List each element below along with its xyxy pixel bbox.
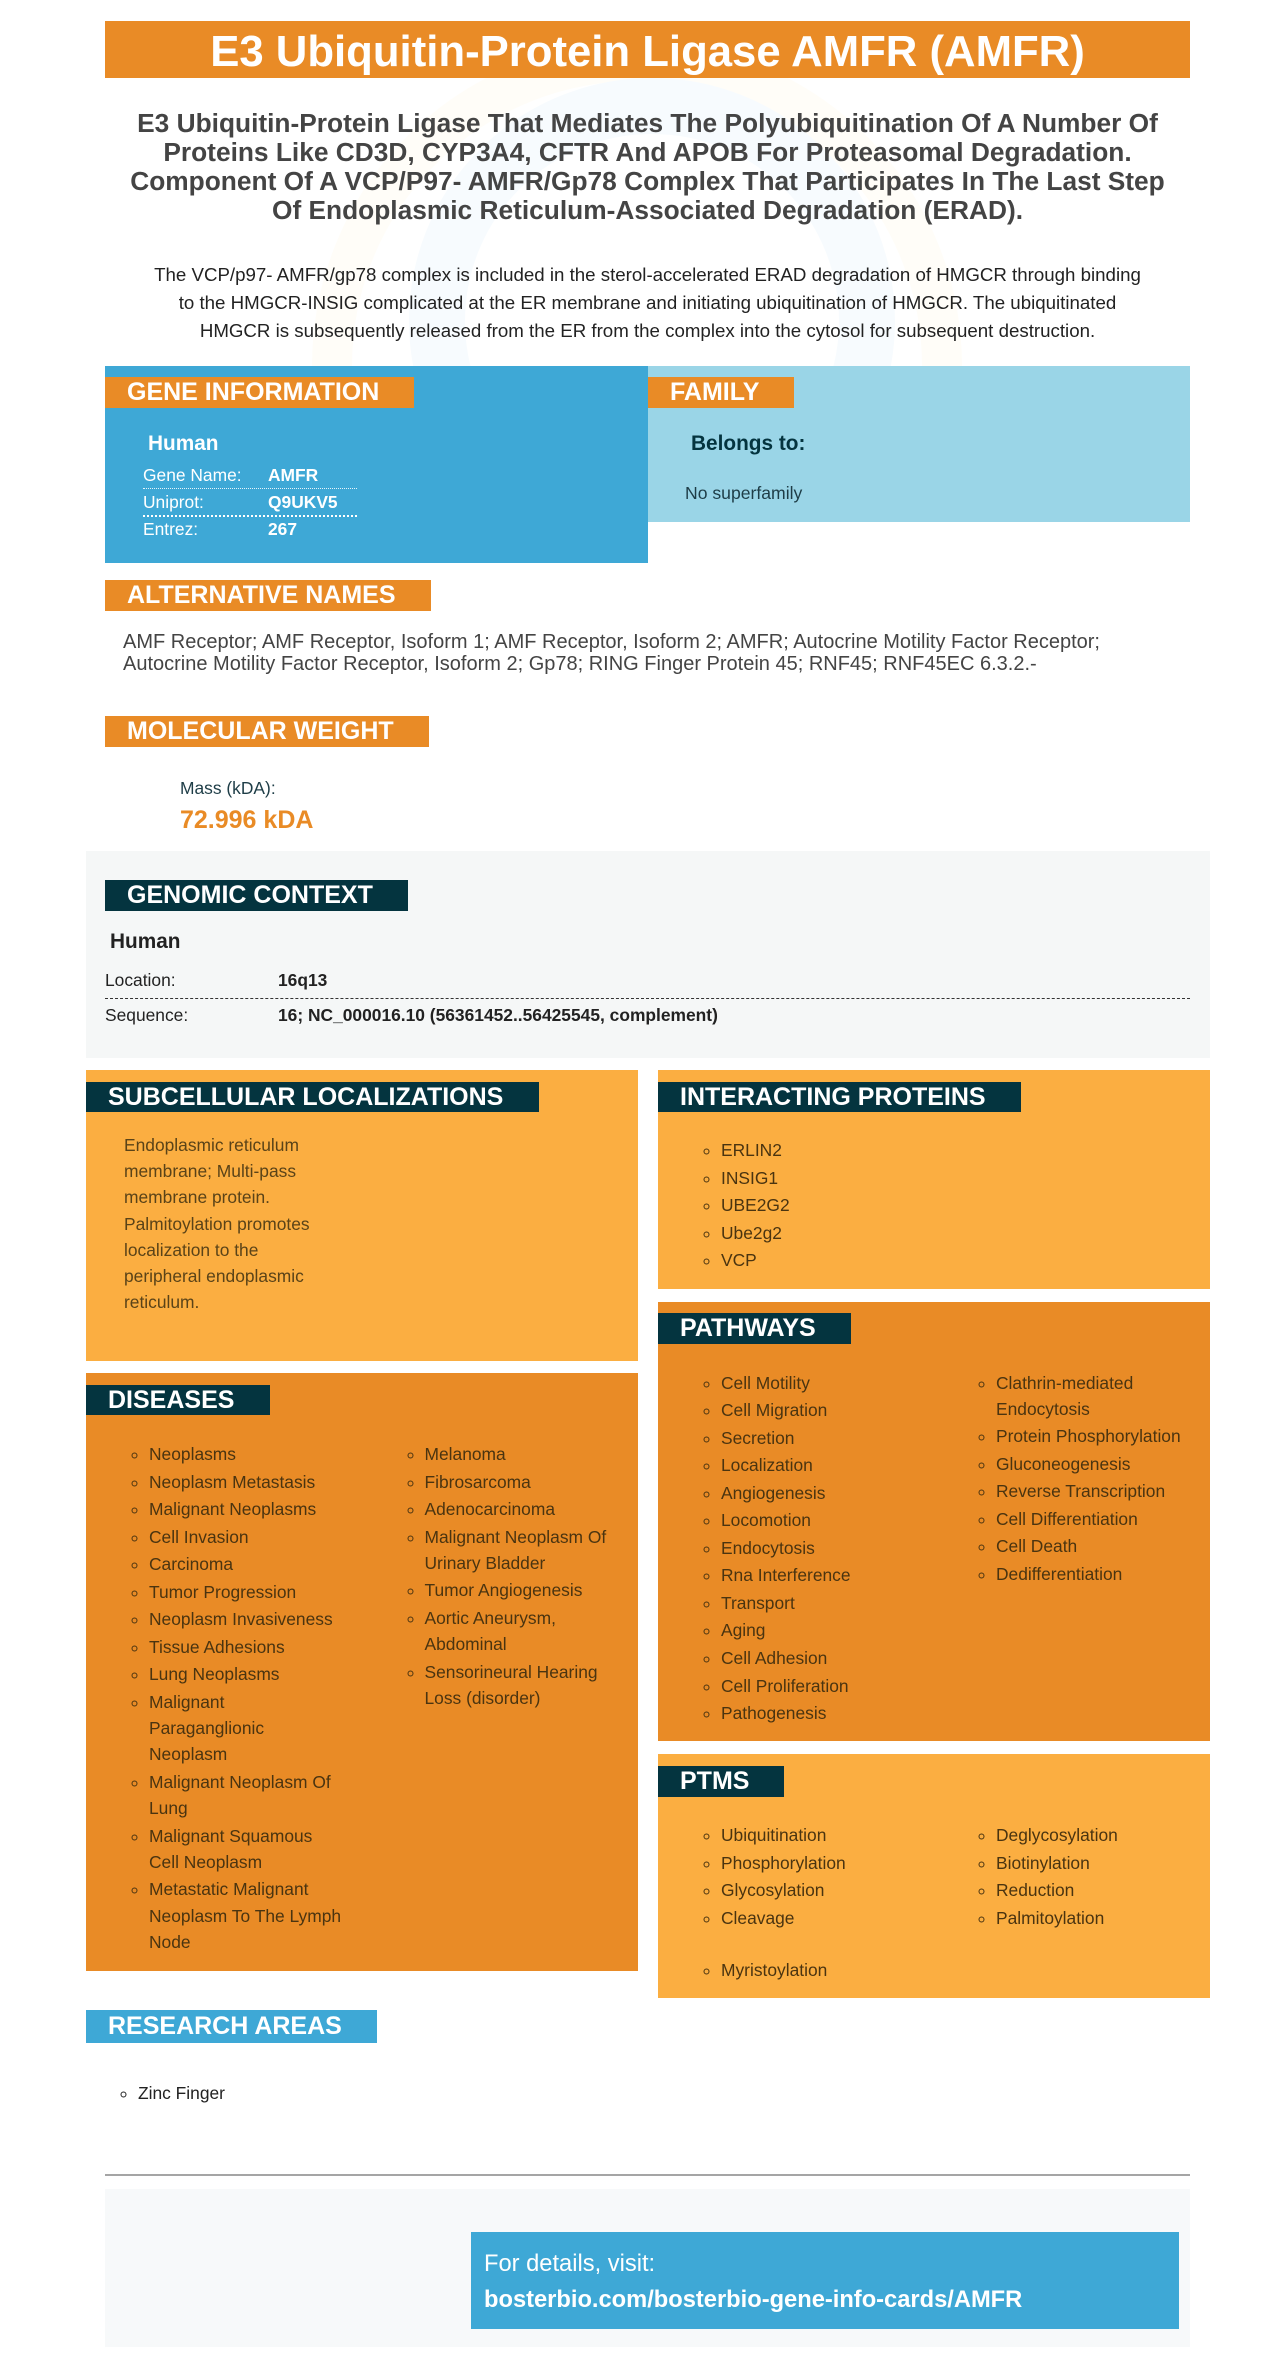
heading: gene information: GENE INFORMATION [127, 378, 379, 406]
pathways list column 1: Pathogenesis [721, 1703, 826, 1723]
localization text: membrane protein. [124, 1187, 270, 1207]
mass value: 72.996 kDA [180, 806, 313, 834]
diseases list column 2: Fibrosarcoma [424, 1472, 531, 1492]
pathways list column 1: Rna Interference [721, 1565, 851, 1585]
heading: ptms [658, 1766, 784, 1797]
pathways list column 1: Aging [721, 1620, 765, 1640]
heading: research areas [86, 2010, 377, 2043]
pathways list column 2: Cell Differentiation [996, 1509, 1138, 1529]
diseases list column 2: Urinary Bladder [424, 1553, 545, 1573]
uniprot row: Uniprot: [143, 492, 204, 512]
ptms list column 1: Cleavage [721, 1908, 794, 1928]
heading: family [648, 377, 794, 408]
localization text: Endoplasmic reticulum [124, 1135, 299, 1155]
title [105, 21, 1190, 78]
diseases list column 2: Aortic Aneurysm, [424, 1608, 556, 1628]
pathways list column 1: Localization [721, 1455, 813, 1475]
subtitle: E3 Ubiquitin-Protein Ligase That Mediates The Polyubiquitination Of A Number Of [137, 108, 1158, 138]
location row: Location: [105, 970, 176, 990]
diseases list column 1: Malignant Squamous [149, 1826, 312, 1846]
mass label: Mass (kDA): [180, 778, 276, 798]
localization text: localization to the [124, 1240, 258, 1260]
diseases list column 1: Malignant [149, 1692, 224, 1712]
diseases list column 2: Loss (disorder) [424, 1688, 540, 1708]
panel: footer [105, 2189, 1190, 2347]
pathways list column 2: Reverse Transcription [996, 1481, 1165, 1501]
localization text: membrane; Multi-pass [124, 1161, 296, 1181]
ptms list column 1: Phosphorylation [721, 1853, 846, 1873]
diseases list column 1: Metastatic Malignant [149, 1879, 308, 1899]
diseases list column 1: Cell Neoplasm [149, 1852, 262, 1872]
subtitle [130, 108, 1165, 225]
species label: Human [148, 432, 218, 455]
pathways list column 1: Cell Migration [721, 1400, 827, 1420]
diseases list column 2: Tumor Angiogenesis [424, 1580, 582, 1600]
heading: diseases: DISEASES [108, 1386, 234, 1414]
diseases list column 2: Abdominal [424, 1634, 507, 1654]
pathways list column 2: Dedifferentiation [996, 1564, 1122, 1584]
gene name row [143, 462, 357, 489]
diseases list column 1: Node [149, 1932, 191, 1952]
diseases list column 1: Neoplasm Invasiveness [149, 1609, 333, 1629]
diseases list column 2: Adenocarcinoma [424, 1499, 555, 1519]
alternative names text: AMF Receptor; AMF Receptor, Isoform 1; AMF Receptor, Isoform 2; AMFR; Autocrine Motility Factor Receptor; [123, 631, 1100, 653]
diseases list column 1: Neoplasm To The Lymph [149, 1906, 341, 1926]
location row: 16q13 [278, 970, 327, 990]
description paragraph: The VCP/p97- AMFR/gp78 complex is included in the sterol-accelerated ERAD degradation of HMGCR through binding [154, 264, 1141, 285]
callout: details link [471, 2232, 1179, 2329]
protein list: VCP [721, 1250, 757, 1270]
diseases list column 1: Tissue Adhesions [149, 1637, 285, 1657]
subtitle: Proteins Like CD3D, CYP3A4, CFTR And APOB For Proteasomal Degradation. [163, 137, 1132, 167]
ptms list column 1: Glycosylation [721, 1880, 824, 1900]
panel: pathways [658, 1302, 1210, 1741]
protein list: INSIG1 [721, 1168, 778, 1188]
belongs to label: Belongs to: [691, 432, 805, 455]
subtitle: Component Of A VCP/P97- AMFR/Gp78 Complex That Participates In The Last Step [130, 166, 1165, 196]
diseases list column 1: Neoplasms [149, 1444, 236, 1464]
heading: alternative names: ALTERNATIVE NAMES [127, 581, 396, 609]
pathways list column 2: Gluconeogenesis [996, 1454, 1130, 1474]
description paragraph: to the HMGCR-INSIG complicated at the ER membrane and initiating ubiquitination of HMGCR. The ubiquitinated [179, 292, 1116, 313]
gene name row: Gene Name: [143, 465, 242, 485]
heading: genomic context: GENOMIC CONTEXT [127, 881, 373, 909]
diseases list column 2 [408, 1444, 606, 1708]
gene name row: AMFR [268, 465, 318, 485]
pathways list column 2 [978, 1372, 1181, 1584]
ptms list column 2: Reduction [996, 1880, 1074, 1900]
protein list: UBE2G2 [721, 1195, 790, 1215]
diseases list column 1: Lung [149, 1798, 188, 1818]
localization text [124, 1135, 310, 1312]
panel: family [648, 366, 1190, 522]
ptms list column 1: Ubiquitination [721, 1825, 826, 1845]
subtitle: Of Endoplasmic Reticulum-Associated Degradation (ERAD). [272, 195, 1023, 225]
description paragraph [154, 264, 1141, 341]
diseases list column 1: Neoplasm Metastasis [149, 1472, 315, 1492]
localization text: peripheral endoplasmic [124, 1266, 304, 1286]
diseases list column 2: Sensorineural Hearing [424, 1662, 598, 1682]
diseases list column 1: Lung Neoplasms [149, 1664, 280, 1684]
pathways list column 1: Cell Adhesion [721, 1648, 827, 1668]
ptms list column 2: Deglycosylation [996, 1825, 1118, 1845]
heading: molecular weight: MOLECULAR WEIGHT [127, 717, 394, 745]
pathways list column 1 [704, 1372, 851, 1723]
entrez row: 267 [268, 519, 297, 539]
diseases list column 1: Tumor Progression [149, 1582, 296, 1602]
pathways list column 2: Endocytosis [996, 1399, 1090, 1419]
description paragraph: HMGCR is subsequently released from the ER from the complex into the cytosol for subsequent destruction. [200, 320, 1095, 341]
diseases list column 2: Malignant Neoplasm Of [424, 1527, 606, 1547]
species label: Human [110, 930, 180, 953]
diseases list column 2: Melanoma [424, 1444, 506, 1464]
panel: ptms [658, 1754, 1210, 1998]
protein list [704, 1140, 790, 1270]
heading: pathways [658, 1313, 851, 1344]
no superfamily text: No superfamily [685, 483, 802, 503]
protein list: ERLIN2 [721, 1140, 782, 1160]
heading: family: FAMILY [670, 378, 759, 406]
panel: genomic context [86, 851, 1210, 1058]
diseases list column 1: Neoplasm [149, 1744, 227, 1764]
entrez row: Entrez: [143, 519, 198, 539]
pathways list column 1: Cell Proliferation [721, 1676, 849, 1696]
diseases list column 1: Cell Invasion [149, 1527, 249, 1547]
diseases list column 1: Carcinoma [149, 1554, 233, 1574]
uniprot row [143, 489, 357, 517]
details url: bosterbio.com/bosterbio-gene-info-cards/AMFR [484, 2287, 1022, 2313]
protein list: Ube2g2 [721, 1223, 782, 1243]
pathways list column 1: Locomotion [721, 1510, 811, 1530]
heading: subcellular localizations: SUBCELLULAR LOCALIZATIONS [108, 1083, 503, 1111]
panel: subcellular localizations [86, 1070, 638, 1361]
pathways list column 1: Transport [721, 1593, 795, 1613]
heading: pathways: PATHWAYS [680, 1314, 816, 1342]
diseases list column 1: Paraganglionic [149, 1718, 264, 1738]
alternative names text: Autocrine Motility Factor Receptor, Isoform 2; Gp78; RING Finger Protein 45; RNF45; RNF45EC 6.3.2.- [123, 653, 1037, 675]
pathways list column 1: Secretion [721, 1428, 794, 1448]
ptms list column 2: Palmitoylation [996, 1908, 1104, 1928]
heading: ptms: PTMS [680, 1767, 749, 1795]
details label: For details, visit: [484, 2251, 655, 2277]
heading: interacting proteins: INTERACTING PROTEINS [680, 1083, 986, 1111]
uniprot row: Q9UKV5 [268, 492, 338, 512]
diseases list column 1: Malignant Neoplasms [149, 1499, 316, 1519]
alternative names text [123, 631, 1100, 675]
ptms list column 1 [704, 1825, 846, 1980]
research areas list: Zinc Finger [138, 2083, 225, 2103]
pathways list column 2: Clathrin-mediated [996, 1372, 1133, 1392]
title: E3 Ubiquitin-Protein Ligase AMFR (AMFR) [210, 27, 1085, 76]
ptms list column 1: Myristoylation [721, 1960, 827, 1980]
sequence row: Sequence: [105, 1005, 188, 1025]
heading: research areas: RESEARCH AREAS [108, 2012, 342, 2040]
pathways list column 2: Cell Death [996, 1536, 1077, 1556]
panel: interacting proteins [658, 1070, 1210, 1289]
entrez row [143, 519, 297, 539]
panel: diseases [86, 1373, 638, 1971]
pathways list column 1: Angiogenesis [721, 1483, 825, 1503]
ptms list column 2: Biotinylation [996, 1853, 1090, 1873]
localization text: Palmitoylation promotes [124, 1214, 310, 1234]
watermark logo [0, 78, 1288, 366]
location row [105, 967, 1190, 999]
sequence row: 16; NC_000016.10 (56361452..56425545, complement) [278, 1005, 718, 1025]
diseases list column 1: Malignant Neoplasm Of [149, 1772, 331, 1792]
diseases list column 1 [132, 1444, 341, 1952]
pathways list column 1: Cell Motility [721, 1372, 810, 1392]
heading: diseases [86, 1385, 270, 1415]
ptms list column 2 [978, 1825, 1118, 1928]
localization text: reticulum. [124, 1292, 199, 1312]
pathways list column 1: Endocytosis [721, 1538, 815, 1558]
pathways list column 2: Protein Phosphorylation [996, 1426, 1181, 1446]
panel: gene information [105, 366, 648, 563]
